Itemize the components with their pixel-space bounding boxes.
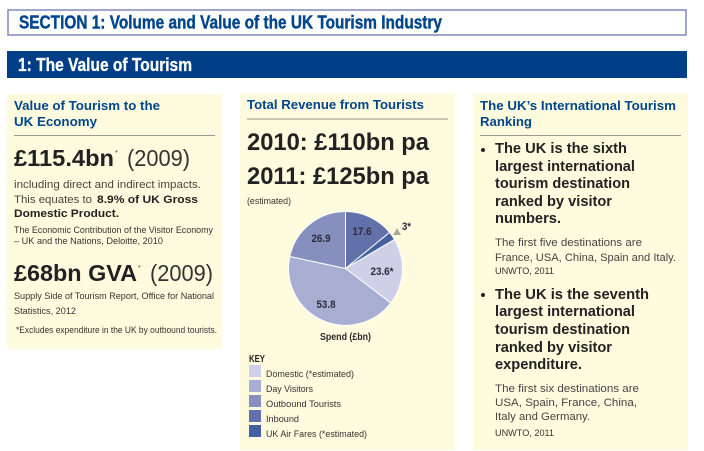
detail: first six destinations: Italy and Germany. (495, 411, 590, 423)
ranking: visitor expenditure (481, 286, 649, 373)
ranking: visitor expenditure: largest international (495, 303, 635, 320)
ranking: visitor expenditure: expenditure. (495, 356, 582, 373)
detail: first six destinations (495, 383, 639, 438)
description text: Domestic Product. (14, 208, 119, 220)
pie chart: 23.6* (370, 266, 394, 278)
headline figure: £115.4bn: * (115, 150, 118, 157)
pie chart: 26.9 (312, 233, 330, 245)
headline figure: £68bn GVA: * (138, 265, 141, 272)
headline figure: £68bn GVA (14, 260, 213, 286)
description text (14, 179, 201, 220)
ranking: visitor numbers: tourism destination (495, 175, 630, 192)
revenue figures: 2011: £125bn pa (247, 163, 429, 190)
detail: first five destinations (495, 237, 676, 276)
headline figure: £115.4bn: (2009) (127, 145, 190, 171)
ranking: visitor numbers: numbers. (495, 210, 561, 227)
panel: total revenue from tourists (240, 93, 455, 450)
headline figure: £68bn GVA: (2009) (150, 260, 213, 286)
legend: KEY (249, 354, 265, 365)
pie chart (289, 212, 412, 343)
source: Office for National Statistics: Statistics, 2012 (14, 306, 76, 316)
description text: 8.9% of UK Gross (97, 194, 198, 206)
panel heading: The UK’s International Tourism (480, 98, 676, 113)
panel heading: Ranking (480, 114, 532, 129)
detail: first six destinations: The first six destinations are (495, 383, 639, 395)
ranking: visitor expenditure: tourism destination (495, 321, 630, 338)
description text: including direct and indirect impacts. (14, 179, 201, 191)
revenue figures: 2010: £110bn pa (247, 129, 429, 156)
panel: UK international tourism ranking (473, 93, 688, 450)
source: Office for National Statistics: Supply Side of Tourism Report, Office for National (14, 291, 214, 301)
pie chart: 53.8 (316, 299, 336, 311)
legend: Inbound (266, 414, 299, 425)
headline figure: £115.4bn (14, 145, 190, 171)
legend: Day Visitors (266, 384, 313, 395)
headline figure: £115.4bn: £115.4bn (14, 145, 114, 171)
section header (8, 10, 686, 35)
panel heading: Total Revenue from Tourists (247, 97, 424, 112)
source: Deloitte: The Economic Contribution of the Visitor Economy (14, 225, 213, 235)
legend (249, 354, 367, 440)
legend: UK Air Fares (*estimated) (266, 429, 367, 440)
footnote: *Excludes expenditure in the UK by outbound tourists. (16, 325, 217, 335)
title bar: 1: The Value of Tourism (18, 55, 192, 75)
panel heading: UK Economy (14, 114, 98, 129)
pie chart: 3* (402, 221, 412, 233)
source: Office for National Statistics (14, 291, 214, 316)
legend: Outbound Tourists (266, 399, 341, 410)
detail: first six destinations: USA, Spain, France, China, (495, 397, 637, 409)
ranking: visitor numbers: largest international (495, 158, 635, 175)
panel heading (14, 98, 160, 129)
revenue figures: (estimated) (247, 196, 291, 206)
detail: first five destinations: The first five destinations are (495, 237, 642, 249)
panel heading (480, 98, 676, 129)
panel heading: Value of Tourism to the (14, 98, 160, 113)
source: Deloitte (14, 225, 213, 246)
revenue figures (247, 129, 429, 206)
ranking: visitor numbers: The UK is the sixth (495, 140, 627, 157)
detail: first six destinations: UNWTO, 2011 (495, 428, 554, 438)
ranking: visitor numbers (481, 140, 635, 227)
pie chart: Spend (£bn) (320, 331, 371, 343)
pie chart: 17.6 (352, 226, 372, 238)
description text: This equates to (14, 194, 92, 206)
detail: first five destinations: France, USA, China, Spain and Italy. (495, 252, 676, 264)
source: Deloitte: – UK and the Nations, Deloitte, 2010 (14, 236, 163, 246)
detail: first five destinations: UNWTO, 2011 (495, 266, 554, 276)
ranking: visitor expenditure: ranked by visitor (495, 339, 612, 356)
headline figure: £68bn GVA: £68bn GVA (14, 260, 137, 286)
panel: value of tourism to the UK economy (7, 94, 222, 349)
ranking: visitor expenditure: The UK is the seventh (495, 286, 649, 303)
legend: Domestic (*estimated) (266, 369, 354, 380)
ranking: visitor numbers: ranked by visitor (495, 193, 612, 210)
section header: SECTION 1: Volume and Value of the UK Tourism Industry (19, 12, 442, 32)
title bar (7, 51, 687, 78)
